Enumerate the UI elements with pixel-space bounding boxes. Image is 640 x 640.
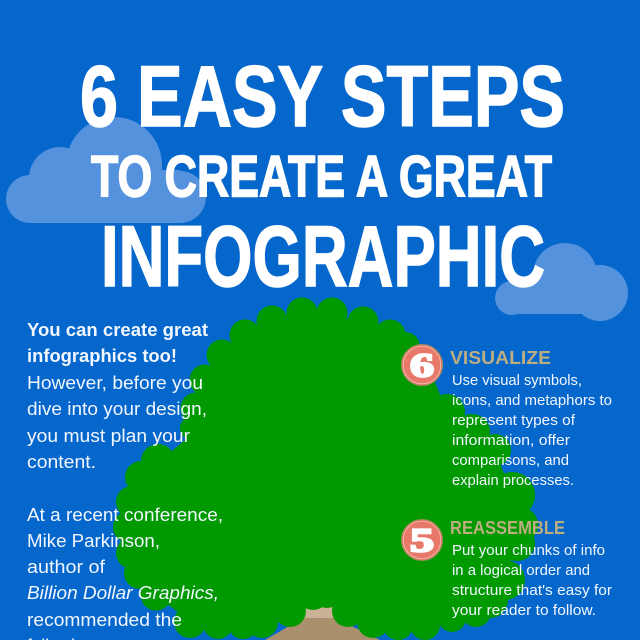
intro paragraph 2: author of — [27, 557, 106, 577]
step 6 description: comparisons, and — [452, 453, 569, 469]
intro bold lead: You can create great — [27, 320, 208, 340]
step 5: reassemble — [402, 517, 612, 619]
title — [80, 49, 565, 305]
step 6: visualize — [402, 344, 612, 489]
intro paragraph 2 — [27, 505, 223, 640]
step 6 description: Use visual symbols, — [452, 373, 582, 389]
badge: number 5 — [402, 520, 442, 560]
intro paragraph 1: However, before you — [27, 373, 203, 393]
icon: right cloud — [495, 243, 628, 321]
icon: tree trunk — [265, 604, 380, 640]
heading: reassemble: REASSEMBLE — [450, 517, 565, 538]
badge: number 6 — [402, 344, 442, 386]
intro paragraph 1: dive into your design, — [27, 399, 207, 419]
icon: left cloud — [6, 117, 206, 223]
step 5 description: in a logical order and — [452, 563, 590, 579]
intro paragraph 2: recommended the — [27, 610, 182, 630]
step 5 description: structure that's easy for — [452, 583, 612, 599]
intro paragraph 2: At a recent conference, — [27, 505, 223, 525]
heading: visualize: VISUALIZE — [450, 347, 551, 368]
step 5 description — [452, 543, 612, 619]
intro bold lead: infographics too! — [27, 346, 177, 366]
icon: tree canopy — [113, 298, 538, 640]
step 5 description: your reader to follow. — [452, 603, 596, 619]
intro paragraph 2: Mike Parkinson, — [27, 531, 160, 551]
intro bold lead — [27, 320, 208, 366]
intro paragraph 1 — [27, 373, 207, 472]
badge: number 5: 5 — [410, 522, 434, 560]
step 6 description: information, offer — [452, 433, 570, 449]
step 6 description: icons, and metaphors to — [452, 393, 612, 409]
intro paragraph 2: Billion Dollar Graphics, — [27, 583, 219, 603]
step 6 description: explain processes. — [452, 473, 574, 489]
badge: number 6: 6 — [410, 348, 434, 384]
intro text block — [27, 320, 223, 640]
intro paragraph 1: you must plan your — [27, 426, 190, 446]
step 6 description — [452, 373, 612, 489]
step 5 description: Put your chunks of info — [452, 543, 605, 559]
step 6 description: represent types of — [452, 413, 576, 429]
intro paragraph 1: content. — [27, 452, 96, 472]
